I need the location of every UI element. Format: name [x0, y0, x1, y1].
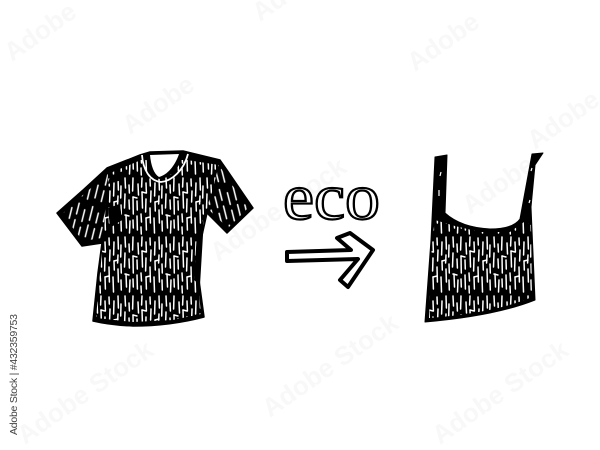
- watermark: Adobe Stock: [11, 334, 159, 450]
- watermark: Adobe Stock: [204, 151, 352, 267]
- watermark: Adobe: [116, 69, 200, 140]
- icon: shopping bag: [420, 153, 545, 325]
- arrow: [287, 233, 373, 287]
- bag strap flecks: [439, 168, 532, 203]
- watermark: Adobe: [456, 149, 540, 220]
- credit text: Adobe Stock | #432359753: [8, 314, 20, 435]
- illustration: t-shirt eco arrow bag: [10, 150, 544, 435]
- watermark: Adobe Stock: [426, 334, 574, 450]
- watermark: Adobe Stock: [256, 307, 404, 423]
- icon: t-shirt: [55, 151, 255, 326]
- shirt shading: [108, 170, 204, 285]
- watermark: Adobe: [401, 6, 485, 77]
- icon: shirt collar: [142, 153, 188, 182]
- label: eco: eco: [283, 161, 380, 234]
